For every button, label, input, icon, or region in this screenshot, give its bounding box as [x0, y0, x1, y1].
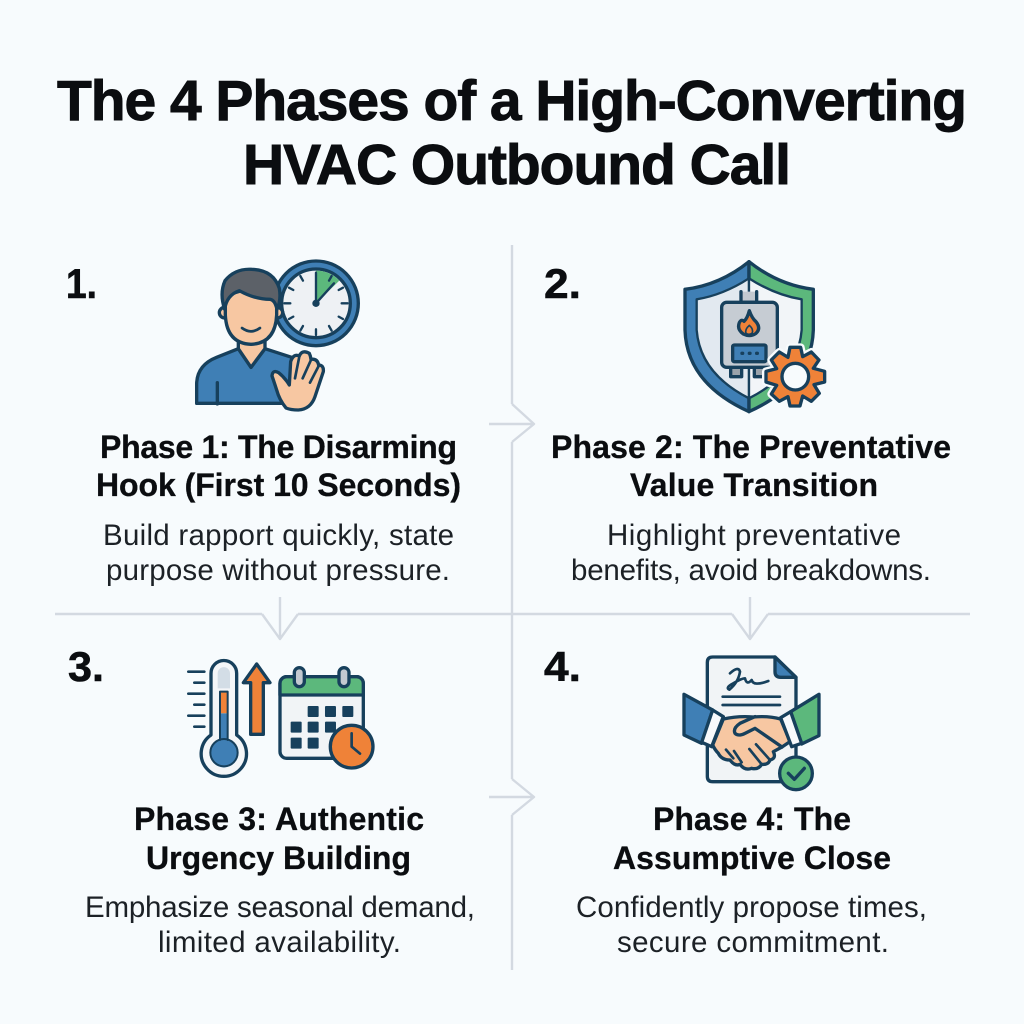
heading: Urgency Building: [146, 840, 411, 876]
panel: phase 2: [544, 260, 951, 587]
number 4: 4.: [544, 643, 581, 690]
arrow: phase 1 to phase 2: [489, 404, 534, 442]
title: The 4 Phases of a High-Converting: [57, 69, 967, 133]
body text: [103, 519, 454, 587]
body text: purpose without pressure.: [106, 554, 450, 587]
heading: Phase 4: The: [653, 801, 851, 837]
body text: benefits, avoid breakdowns.: [571, 554, 931, 587]
heading: Phase 1: The Disarming: [100, 429, 457, 465]
number 2: 2.: [544, 260, 581, 307]
title: HVAC Outbound Call: [243, 133, 791, 197]
body text: Confidently propose times,: [576, 891, 927, 924]
body text: Emphasize seasonal demand,: [85, 891, 475, 924]
heading: Phase 2: The Preventative: [551, 429, 951, 465]
arrow: phase 1 to phase 3: [262, 597, 298, 639]
body text: [571, 519, 931, 587]
arrow: phase 2 to phase 4: [732, 597, 768, 639]
body text: limited availability.: [158, 926, 401, 959]
body text: Highlight preventative: [607, 519, 901, 552]
body text: Build rapport quickly, state: [103, 519, 454, 552]
heading: Assumptive Close: [613, 840, 891, 876]
title: [57, 69, 967, 197]
heading: [96, 429, 461, 503]
icon: shield with water heater and gear: [685, 262, 825, 412]
heading: [613, 801, 891, 876]
number 1: 1.: [66, 260, 97, 307]
panel: phase 3: [68, 643, 475, 959]
heading: Value Transition: [630, 467, 878, 503]
heading: [551, 429, 951, 503]
heading: Phase 3: Authentic: [134, 801, 424, 837]
heading: Hook (First 10 Seconds): [96, 467, 461, 503]
icon: person with clock and raised hand: [197, 261, 358, 410]
panel: phase 1: [66, 260, 461, 587]
panel: phase 4: [544, 643, 927, 959]
body text: [576, 891, 927, 959]
heading: [134, 801, 424, 876]
body text: [85, 891, 475, 959]
number 3: 3.: [68, 643, 104, 690]
arrow: phase 3 to phase 4: [489, 779, 534, 815]
body text: secure commitment.: [617, 926, 889, 959]
icon: contract, handshake and check: [684, 657, 819, 790]
icon: thermometer, arrow and calendar: [188, 660, 373, 776]
